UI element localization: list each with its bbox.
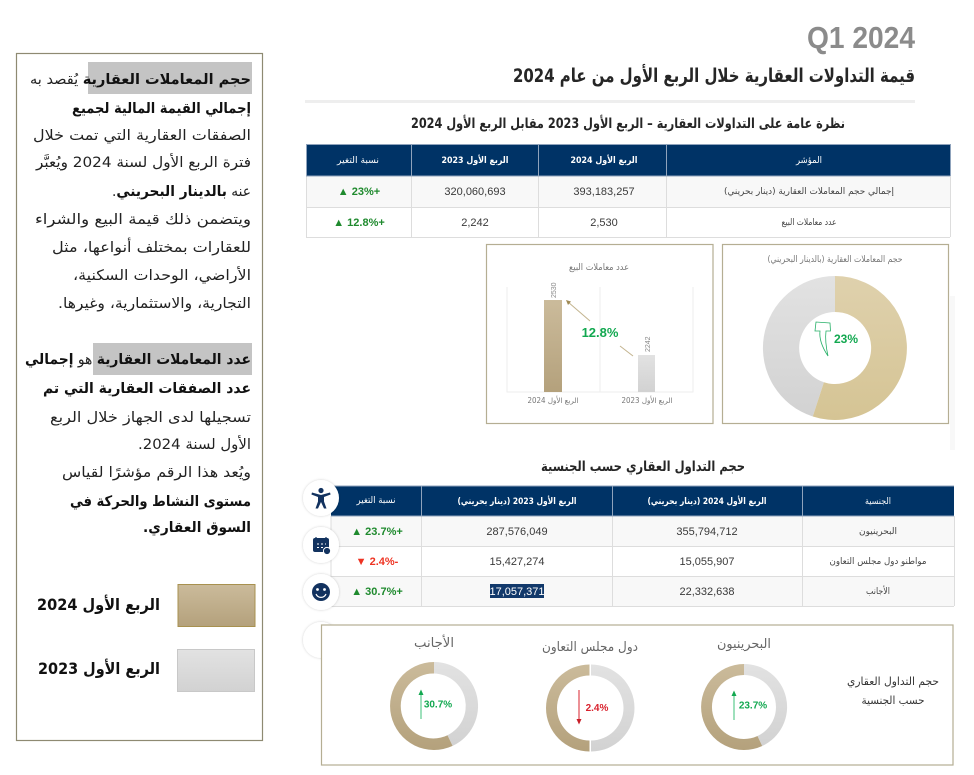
table: overview: ▲ 12.8%+ (333, 217, 385, 229)
highlighted value: 17,057,371 (489, 586, 545, 598)
arrow: growth from 2023 bar (620, 346, 633, 356)
donut: Bahrainis: 23.7% (739, 700, 767, 712)
panel: nationality donuts (322, 625, 953, 765)
table: by nationality: 287,576,049 (486, 526, 548, 538)
icon: calendar check (303, 527, 339, 563)
table: overview: الربع الأول 2024 (570, 154, 638, 166)
text block: transaction volume definition (30, 72, 251, 312)
text block: transaction volume definition: إجمالي القيمة المالية لجميع (72, 101, 251, 117)
donut: foreigners (390, 634, 478, 750)
text block: transaction volume definition: التجارية، والاستثمارية، وغيرها. (58, 296, 251, 312)
donut: GCC citizens (542, 640, 638, 752)
highlight: transaction volume term (88, 62, 252, 94)
panel: sales transactions bar chart: 2530 (551, 282, 558, 298)
legend: Q1 2024: الربع الأول 2024 (37, 595, 160, 614)
icon: partly hidden circle (303, 622, 339, 658)
table: overview: نسبة التغير (336, 156, 379, 166)
text block: transaction count definition: عدد الصفقات العقارية التي تم (43, 381, 251, 397)
table: by nationality: الربع الأول 2024 (دينار بحريني) (648, 495, 766, 507)
donut: Q1 2023 share (763, 276, 835, 416)
table: overview: الربع الأول 2023 (442, 154, 508, 166)
text block: panel label: حجم التداول العقاري (847, 675, 939, 688)
heading: nationality table: حجم التداول العقاري حسب الجنسية (541, 459, 745, 476)
icon: accessibility person (303, 480, 339, 516)
panel: sales transactions bar chart (486, 244, 713, 424)
arrow: growth to 2024 bar (566, 300, 590, 321)
table: overview: 320,060,693 (444, 186, 506, 198)
donut: Bahrainis (701, 637, 787, 750)
heading: overview table: نظرة عامة على التداولات العقارية – الربع الأول 2023 مقابل الربع الأول 2024 (411, 115, 845, 132)
table: by nationality: 355,794,712 (676, 526, 738, 538)
table: by nationality: 15,427,274 (489, 556, 545, 568)
donut: Bahrainis: البحرينيون (717, 637, 771, 652)
text block: transaction count definition: الأول لسنة 2024. (138, 435, 251, 453)
table: by nationality: الأجانب (866, 585, 890, 597)
table: by nationality: مواطنو دول مجلس التعاون (830, 557, 927, 567)
highlight: transaction count term (93, 343, 252, 375)
donut: GCC citizens: دول مجلس التعاون (542, 640, 638, 655)
panel: sales transactions bar chart: 2242 (645, 336, 652, 352)
text block: transaction volume definition: فترة الربع الأول لسنة 2024 ويُعبَّر (35, 153, 251, 171)
value: 23%: 23% (834, 332, 858, 346)
panel: transaction volume donut: حجم المعاملات العقارية (بالدينار البحريني) (768, 255, 902, 265)
table: by nationality: 22,332,638 (679, 586, 735, 598)
table: overview: إجمالي حجم المعاملات العقارية (دينار بحريني) (724, 187, 894, 197)
icon: curved up arrow (815, 322, 830, 356)
text block: transaction count definition (25, 352, 251, 537)
panel: sales transactions bar chart: الربع الأول 2023 (622, 395, 672, 405)
text block: transaction count definition: عدد المعاملات العقارية هو إجمالي (25, 352, 251, 368)
table: by nationality: الربع الأول 2023 (دينار بحريني) (458, 495, 576, 507)
table: overview: ▲ 23%+ (338, 186, 380, 198)
panel: transaction volume donut (722, 244, 948, 424)
panel: definitions sidebar (16, 54, 262, 740)
donut: GCC citizens: 2.4% (586, 703, 609, 714)
table: overview: عدد معاملات البيع (782, 218, 836, 228)
text block: transaction count definition: مستوى النشاط والحركة في (70, 494, 251, 510)
donut: foreigners: 30.7% (424, 700, 452, 710)
legend: Q1 2024 (37, 584, 255, 626)
heading: Q1 2024: Q1 2024 (807, 20, 916, 55)
text block: panel label: حسب الجنسية (862, 694, 924, 707)
table: overview (306, 144, 950, 238)
bar: Q1 2023 (638, 355, 655, 392)
table: overview: 2,530 (590, 217, 618, 229)
value: 12.8%: 12.8% (582, 325, 619, 340)
table: by nationality: نسبة التغير (356, 496, 396, 506)
table: overview: 393,183,257 (573, 186, 635, 198)
donut: foreigners: الأجانب (414, 634, 454, 651)
table: by nationality: الجنسية (865, 497, 891, 507)
text block: transaction volume definition: للعقارات بمختلف أنواعها، مثل (52, 237, 251, 256)
legend: Q1 2023: الربع الأول 2023 (38, 659, 160, 678)
table: by nationality: ▲ 30.7%+ (351, 586, 403, 598)
text block: transaction volume definition: ويتضمن ذلك قيمة البيع والشراء (35, 212, 251, 228)
donut: Q1 2024 share (813, 276, 907, 420)
legend: Q1 2023 (38, 650, 254, 692)
text block: transaction count definition: ويُعد هذا الرقم مؤشرًا لقياس (62, 465, 251, 481)
table: by nationality: ▼ 2.4%- (356, 556, 399, 568)
table: by nationality: 15,055,907 (679, 556, 735, 568)
text block: transaction volume definition: حجم المعاملات العقارية يُقصد به (30, 72, 251, 88)
text block: transaction volume definition: الأراضي، الوحدات السكنية، (73, 266, 251, 284)
table: overview: المؤشر (795, 156, 822, 166)
table: by nationality: ▲ 23.7%+ (351, 526, 403, 538)
icon: smiley (303, 574, 339, 610)
panel: sales transactions bar chart: الربع الأول 2024 (528, 395, 578, 405)
table: by nationality (331, 486, 954, 606)
text block: transaction count definition: السوق العقاري. (143, 520, 251, 537)
panel: sales transactions bar chart: عدد معاملات البيع (569, 263, 629, 273)
bar: Q1 2024 (544, 300, 562, 392)
text block: transaction volume definition: الصفقات العقارية التي تمت خلال (33, 128, 251, 144)
table: overview: 2,242 (461, 217, 489, 229)
text block: panel label (847, 675, 939, 707)
text block: transaction volume definition: عنه بالدينار البحريني. (112, 184, 251, 200)
text block: transaction count definition: تسجيلها لدى الجهاز خلال الربع (50, 410, 251, 426)
table: by nationality: البحرينيون (859, 527, 897, 537)
